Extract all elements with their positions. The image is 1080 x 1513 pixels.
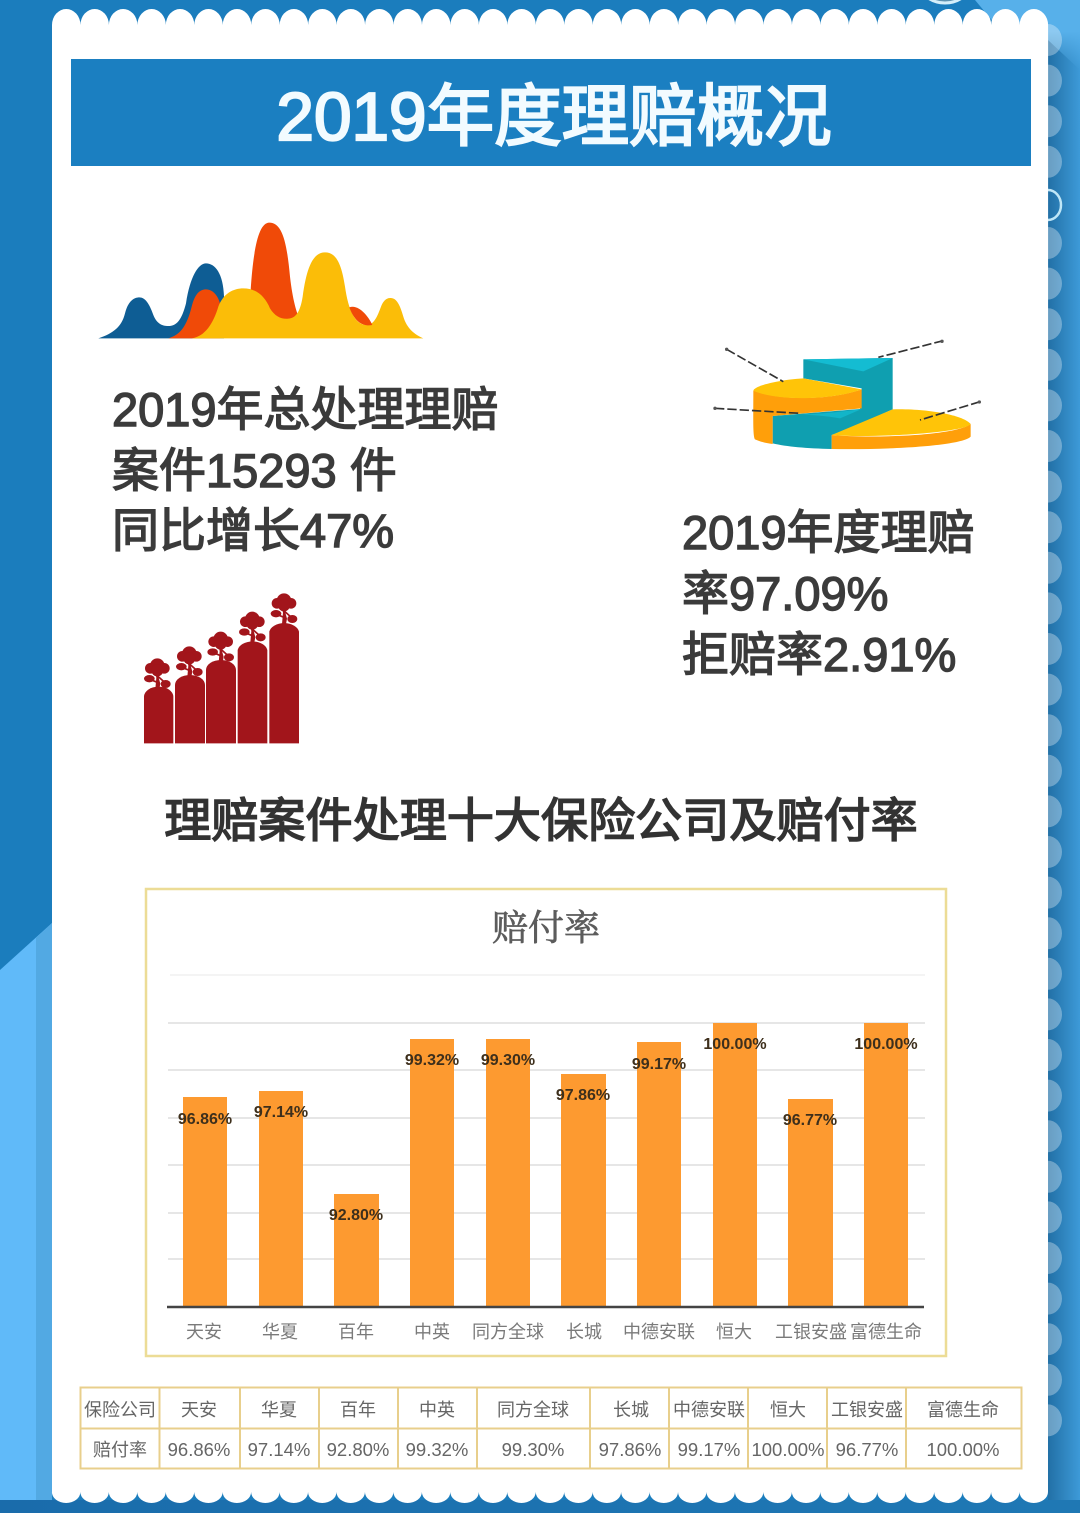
table header row: 工银安盛 <box>831 1400 903 1420</box>
axis labels: 富德生命 <box>850 1322 922 1342</box>
text block: claim rate: 2019年度理赔 <box>682 506 975 559</box>
side tabs <box>1048 24 1062 1436</box>
table values row: 100.00% <box>751 1439 825 1460</box>
text block: total claims: 2019年总处理理赔 <box>112 383 499 436</box>
table header row: 中德安联 <box>673 1400 745 1420</box>
data labels: 99.17% <box>632 1056 686 1073</box>
table header row: 保险公司 <box>84 1400 156 1420</box>
data labels <box>178 1036 918 1224</box>
axis labels: 恒大 <box>716 1322 752 1342</box>
section heading: 理赔案件处理十大保险公司及赔付率 <box>164 794 918 847</box>
chart title: 赔付率 <box>492 908 600 948</box>
text block: claim rate: 率97.09% <box>682 567 888 620</box>
bar chart <box>146 889 946 1356</box>
table values row: 96.77% <box>836 1439 898 1460</box>
data labels: 97.86% <box>556 1087 610 1104</box>
text block: total claims: 案件15293 件 <box>112 444 397 497</box>
table header row: 同方全球 <box>497 1400 569 1420</box>
axis labels: 中英 <box>414 1322 450 1342</box>
axis labels: 百年 <box>338 1322 374 1342</box>
table header row: 长城 <box>613 1400 649 1420</box>
table values row <box>93 1439 1000 1460</box>
table header row: 天安 <box>181 1400 217 1420</box>
axis labels: 华夏 <box>262 1322 298 1342</box>
table header row: 恒大 <box>770 1400 806 1420</box>
table values row: 97.14% <box>248 1439 310 1460</box>
data table <box>80 1387 1022 1469</box>
icon: 3D pie chart <box>713 340 981 449</box>
table values row: 99.30% <box>502 1439 564 1460</box>
axis labels: 中德安联 <box>623 1322 695 1342</box>
icon: growing tree bars <box>144 593 299 743</box>
table values row: 99.17% <box>678 1439 740 1460</box>
data labels: 100.00% <box>854 1036 918 1053</box>
axis labels: 工银安盛 <box>775 1322 847 1342</box>
table values row: 100.00% <box>926 1439 1000 1460</box>
data labels: 96.77% <box>783 1112 837 1129</box>
data labels: 99.30% <box>481 1052 535 1069</box>
data labels: 92.80% <box>329 1207 383 1224</box>
axis labels: 长城 <box>566 1322 602 1342</box>
data labels: 99.32% <box>405 1052 459 1069</box>
table values row: 96.86% <box>168 1439 230 1460</box>
table values row: 赔付率 <box>93 1440 147 1460</box>
axis labels: 天安 <box>186 1322 222 1342</box>
data labels: 100.00% <box>703 1036 767 1053</box>
title banner <box>71 59 1031 166</box>
text block: total claims: 同比增长47% <box>112 504 394 557</box>
title: 2019年度理赔概况 <box>276 80 832 155</box>
table header row: 华夏 <box>261 1400 297 1420</box>
table header row <box>84 1400 999 1420</box>
icon: mountain area chart <box>98 223 423 338</box>
axis labels: 同方全球 <box>472 1322 544 1342</box>
data labels: 97.14% <box>254 1104 308 1121</box>
text block: claim rate: 拒赔率2.91% <box>682 628 956 681</box>
bars <box>183 1023 908 1307</box>
table header row: 中英 <box>419 1400 455 1420</box>
table values row: 99.32% <box>406 1439 468 1460</box>
table values row: 92.80% <box>327 1439 389 1460</box>
table values row: 97.86% <box>599 1439 661 1460</box>
table header row: 富德生命 <box>927 1400 999 1420</box>
table header row: 百年 <box>340 1400 376 1420</box>
data labels: 96.86% <box>178 1111 232 1128</box>
axis labels <box>186 1322 922 1342</box>
